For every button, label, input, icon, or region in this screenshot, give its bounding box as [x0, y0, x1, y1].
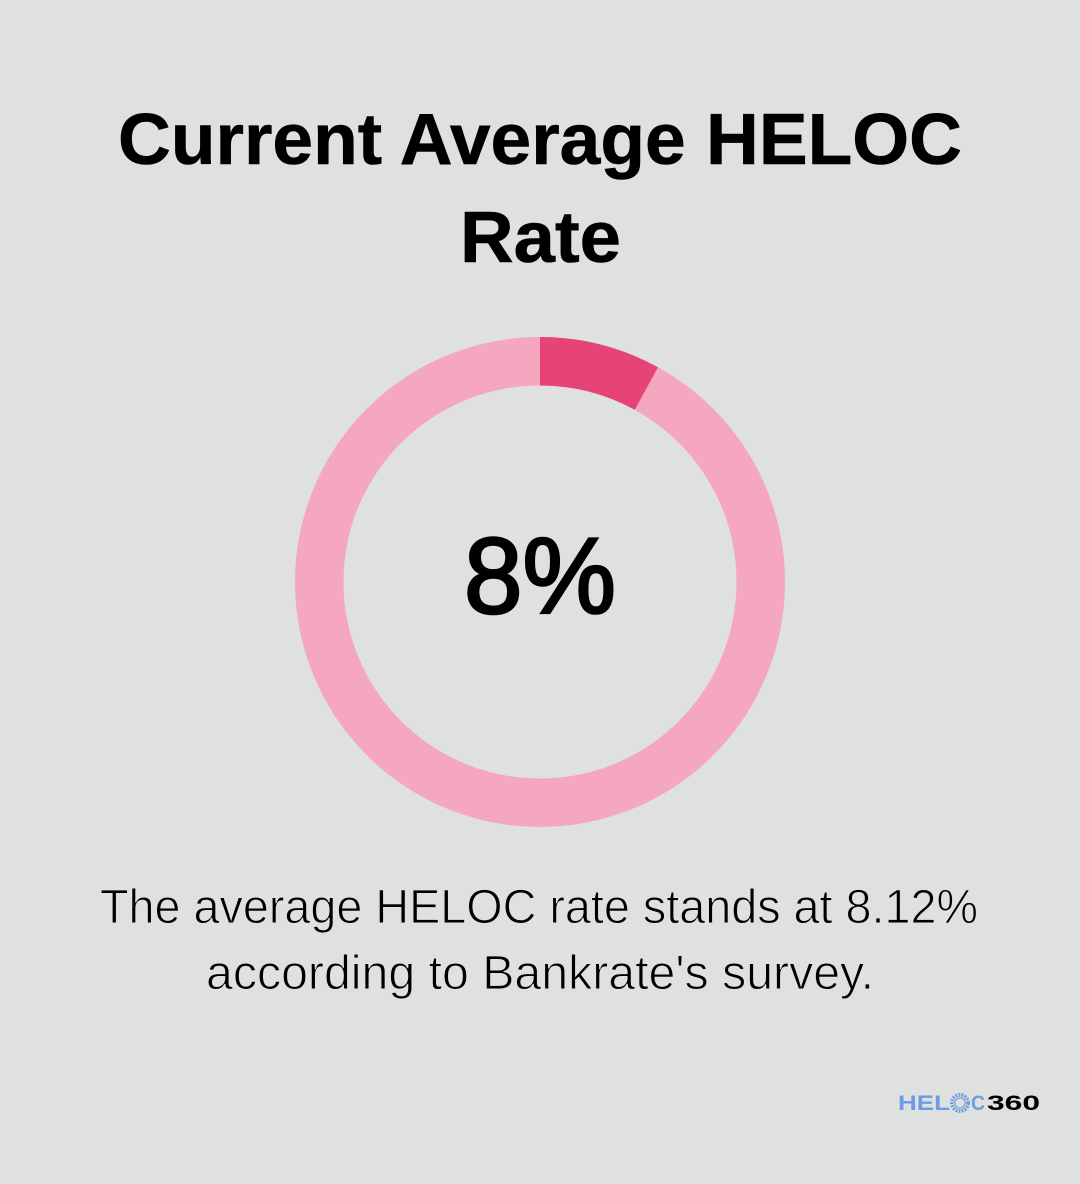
- description text: according to Bankrate's survey.: [206, 947, 874, 1000]
- description text: [100, 881, 978, 1000]
- logo: HELOC360: [898, 1092, 1040, 1115]
- donut track: [319, 361, 761, 803]
- center value: 8%: [464, 515, 616, 636]
- donut chart: 8%: [319, 337, 761, 803]
- logo letter C: C: [971, 1092, 985, 1115]
- donut highlighted segment: [540, 337, 658, 410]
- logo swirl icon: [952, 1095, 968, 1111]
- logo word HEL: HEL: [898, 1092, 950, 1115]
- title: [118, 100, 962, 278]
- description text: The average HELOC rate stands at 8.12%: [100, 881, 978, 934]
- title: Current Average HELOC: [118, 100, 962, 180]
- logo number 360: 360: [987, 1092, 1040, 1115]
- title: Rate: [460, 198, 621, 278]
